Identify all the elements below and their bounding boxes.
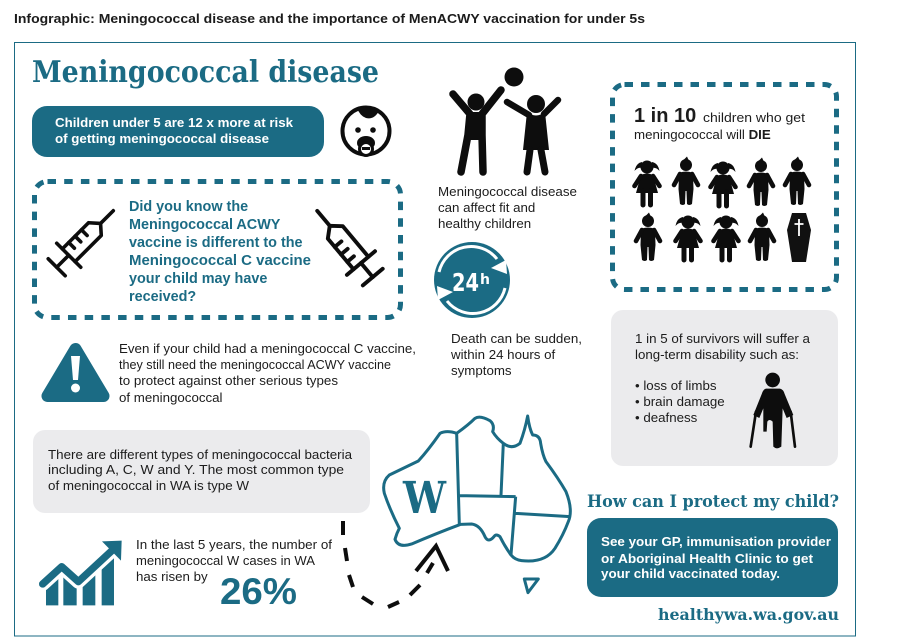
text: death can be sudden: within 24 hours of	[450, 347, 556, 362]
callout: children under 5 risk	[32, 106, 324, 157]
stat text: 1 in 10	[634, 105, 696, 127]
icon: 24 hours clock: h	[480, 272, 490, 288]
callout: children under 5 risk: of getting meningococcal disease	[55, 131, 269, 146]
icon: children playing with ball	[453, 68, 558, 172]
text: fit and healthy children: healthy children	[438, 216, 531, 231]
icon: 24 hours clock: 24	[452, 268, 479, 297]
icon: syringe right	[303, 199, 387, 289]
panel: types of bacteria	[33, 430, 370, 513]
panel: long-term disability: • loss of limbs	[635, 378, 717, 393]
stat: 26%: 26%	[220, 571, 297, 612]
heading: how can I protect my child: How can I protect my child?	[587, 492, 839, 512]
page title: Infographic: Meningococcal disease and the importance of MenACWY vaccination for under 5s	[14, 11, 645, 26]
panel: did you know	[34, 182, 400, 318]
text: W cases rise: has risen by	[136, 569, 208, 584]
question text: vaccine is different to the	[129, 235, 303, 251]
girl figure	[507, 95, 558, 172]
panel: types of bacteria: including A, C, W and Y. The most common type	[48, 462, 344, 477]
website link text: healthywa.wa.gov.au	[658, 605, 839, 624]
panel: long-term disability: 1 in 5 of survivors will suffer a	[635, 331, 811, 346]
callout: see your GP: See your GP, immunisation provider	[601, 534, 831, 549]
callout: see your GP	[587, 518, 838, 597]
pictogram: children row 1	[634, 156, 809, 206]
text: fit and healthy children	[438, 184, 577, 231]
text: W cases rise: meningococcal W cases in WA	[136, 553, 315, 568]
panel: types of bacteria: of meningococcal in WA is type W	[48, 478, 249, 493]
stat text: meningococcal will DIE	[634, 127, 771, 142]
question text: Did you know the	[129, 199, 248, 215]
panel: long-term disability: • brain damage	[635, 394, 725, 409]
heading: Meningococcal disease: Meningococcal disease	[32, 55, 379, 90]
stat text	[634, 105, 805, 142]
panel: 1 in 10	[612, 84, 836, 290]
text: need ACWY vaccine	[119, 341, 416, 405]
panel: long-term disability	[611, 310, 838, 466]
text: need ACWY vaccine: they still need the meningococcal ACWY vaccine	[119, 357, 391, 372]
callout: see your GP: your child vaccinated today.	[601, 566, 780, 581]
text: need ACWY vaccine: to protect against other serious types	[119, 373, 338, 388]
icon: person on crutches	[751, 373, 795, 448]
arrow: dashed to WA	[343, 521, 448, 607]
text: need ACWY vaccine: of meningococcal	[119, 390, 223, 405]
question text: your child may have	[129, 271, 267, 287]
boy figure	[453, 90, 501, 172]
question text: Meningococcal C vaccine	[129, 253, 311, 269]
map of Australia with W	[384, 416, 570, 593]
text: need ACWY vaccine: Even if your child had a meningococcal C vaccine,	[119, 341, 416, 356]
icon: baby with pacifier	[342, 107, 390, 156]
callout: children under 5 risk: Children under 5 are 12 x more at risk	[55, 115, 294, 130]
icon: coffin	[787, 213, 811, 262]
text: death can be sudden: symptoms	[451, 363, 512, 378]
question text: Meningococcal ACWY	[129, 217, 281, 233]
icon: 24 hours clock	[434, 242, 510, 318]
icon: syringe left	[45, 199, 125, 279]
text: fit and healthy children: Meningococcal disease	[438, 184, 577, 199]
text: W cases rise	[136, 537, 332, 584]
stat text: children who get	[703, 110, 805, 125]
map letter W: W	[402, 473, 447, 524]
panel: types of bacteria: There are different types of meningococcal bacteria	[48, 447, 353, 462]
text: W cases rise: In the last 5 years, the number of	[136, 537, 332, 552]
pictogram: children row 2	[636, 212, 774, 261]
question text	[129, 199, 311, 305]
callout: see your GP: or Aboriginal Health Clinic to get	[601, 551, 814, 566]
panel: long-term disability: • deafness	[635, 410, 698, 425]
icon: rising chart	[43, 541, 122, 605]
question text: received?	[129, 289, 196, 305]
text: death can be sudden: Death can be sudden,	[451, 331, 582, 346]
panel: long-term disability: long-term disability such as:	[635, 347, 799, 362]
text: death can be sudden	[450, 331, 582, 378]
icon: warning triangle	[48, 349, 104, 396]
text: fit and healthy children: can affect fit and	[438, 200, 535, 215]
